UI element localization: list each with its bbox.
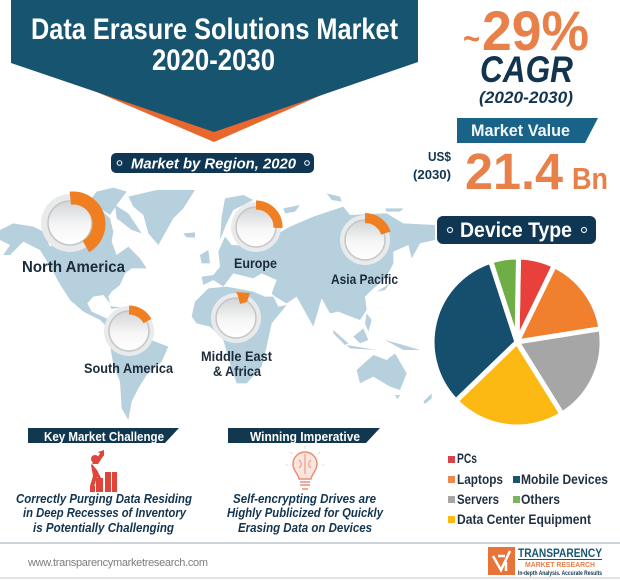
legend: Servers [457, 491, 499, 507]
banner shape [11, 0, 418, 132]
logo: transparency market research: MARKET RESEARCH [525, 562, 595, 569]
CAGR callout: 29% [482, 0, 589, 62]
market value callout: (2030) [413, 167, 451, 182]
heading: market by region [111, 153, 314, 173]
website url: www.transparencymarketresearch.com [27, 557, 208, 569]
CAGR callout: ~ [463, 20, 480, 58]
market value callout: 21.4 [465, 143, 564, 200]
text: winning imperative: Erasing Data on Devices [238, 520, 372, 535]
donut: Asia Pacific [331, 215, 398, 287]
heading: device type [437, 216, 596, 244]
world map [0, 188, 435, 420]
pie chart: device type [432, 257, 602, 427]
donut: Europe: Europe [234, 255, 277, 271]
donut: North America: North America [22, 259, 125, 276]
icon: light bulb with brain [285, 446, 325, 489]
panel: winning imperative [227, 428, 384, 535]
market value callout: Market Value [471, 121, 570, 140]
ribbon: key market challenge: Key Market Challenge [44, 429, 164, 444]
title banner [11, 0, 418, 142]
footer rules [0, 542, 620, 579]
legend [448, 450, 608, 527]
donut: Asia Pacific: Asia Pacific [331, 271, 398, 287]
CAGR callout: CAGR [480, 49, 573, 90]
title [31, 13, 398, 77]
legend: Data Center Equipment [457, 511, 591, 527]
text: challenge: Correctly Purging Data Residing [16, 491, 192, 506]
heading: device type: Device Type [460, 219, 572, 242]
panel: key market challenge [16, 428, 192, 535]
legend: PCs [457, 450, 477, 466]
donut: Middle East and Africa: & Africa [213, 363, 261, 379]
donut: South America: South America [84, 360, 173, 376]
text: winning imperative: Highly Publicized for Quickly [227, 505, 384, 520]
legend: Laptops [457, 471, 503, 487]
legend: Mobile Devices [521, 471, 608, 487]
legend: Others [521, 491, 560, 507]
ribbon: winning imperative: Winning Imperative [250, 429, 360, 444]
donut: North America [22, 194, 125, 276]
donut: South America [84, 306, 173, 376]
title: 2020-2030 [152, 44, 275, 77]
market value callout [413, 118, 608, 200]
donut: Middle East and Africa: Middle East [201, 348, 272, 364]
text: challenge [16, 491, 192, 535]
heading: market by region: Market by Region, 2020 [131, 156, 297, 172]
CAGR callout [463, 0, 589, 107]
text: challenge: is Potentially Challenging [33, 520, 174, 535]
CAGR callout: (2020-2030) [479, 88, 573, 107]
text: winning imperative: Self-encrypting Drives are [233, 491, 376, 506]
icon: climbing figure on bars [90, 450, 117, 492]
logo: transparency market research [488, 546, 602, 577]
title: Data Erasure Solutions Market [31, 13, 398, 46]
text: winning imperative [227, 491, 384, 535]
market value callout: Bn [572, 161, 608, 196]
donut: Middle East and Africa [201, 292, 272, 379]
logo: transparency market research: TRANSPARENCY [518, 546, 602, 560]
banner orange edge [85, 87, 340, 142]
text: challenge: in Deep Recesses of Inventory [23, 505, 187, 520]
donut: Europe [231, 202, 281, 271]
market value callout: US$ [428, 149, 452, 164]
